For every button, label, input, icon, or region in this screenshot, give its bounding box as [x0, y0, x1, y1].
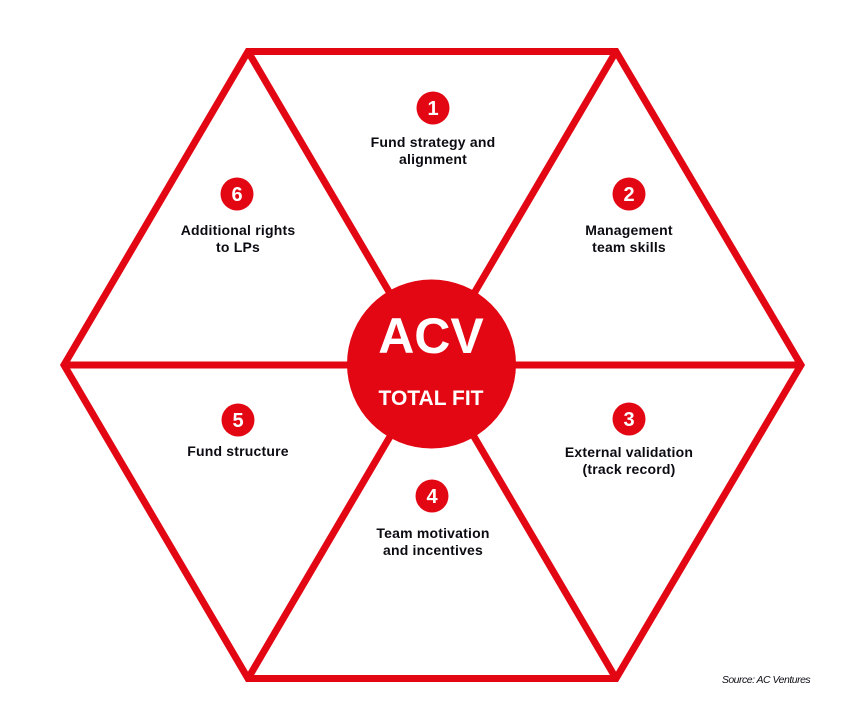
- segment 2: management team: [585, 178, 673, 255]
- segment 6: additional rights: Additional rights: [181, 222, 295, 238]
- segment 1: fund strategy: alignment: [399, 151, 467, 167]
- segment 2: management team: Management: [585, 222, 673, 238]
- center circle: ACV total fit: [347, 280, 516, 448]
- source note: Source: AC Ventures: [722, 674, 811, 686]
- center circle: ACV total fit: TOTAL FIT: [378, 387, 484, 410]
- segment 6: additional rights: [181, 178, 295, 255]
- segment 4: team motivation: and incentives: [383, 542, 483, 558]
- segment 5: fund structure: 5: [232, 410, 244, 432]
- center circle: ACV total fit: ACV: [378, 308, 484, 364]
- segment 3: external validation: 3: [623, 409, 635, 431]
- segment 3: external validation: (track record): [582, 461, 676, 477]
- segment 3: external validation: External validation: [565, 444, 693, 460]
- segment 4: team motivation: Team motivation: [376, 525, 490, 541]
- segment 1: fund strategy: Fund strategy and: [371, 134, 495, 150]
- segment 2: management team: 2: [623, 184, 635, 206]
- segment 4: team motivation: 4: [426, 486, 438, 508]
- segment 6: additional rights: 6: [231, 184, 243, 206]
- segment 4: team motivation: [376, 480, 490, 558]
- segment 2: management team: team skills: [592, 239, 666, 255]
- segment 5: fund structure: [187, 404, 289, 459]
- hexagon frame with spokes: [64, 52, 801, 678]
- segment 3: external validation: [565, 402, 693, 477]
- segment 1: fund strategy: 1: [427, 98, 439, 120]
- segment 5: fund structure: Fund structure: [187, 443, 289, 459]
- segment 1: fund strategy: [371, 92, 495, 167]
- segment 6: additional rights: to LPs: [216, 239, 260, 255]
